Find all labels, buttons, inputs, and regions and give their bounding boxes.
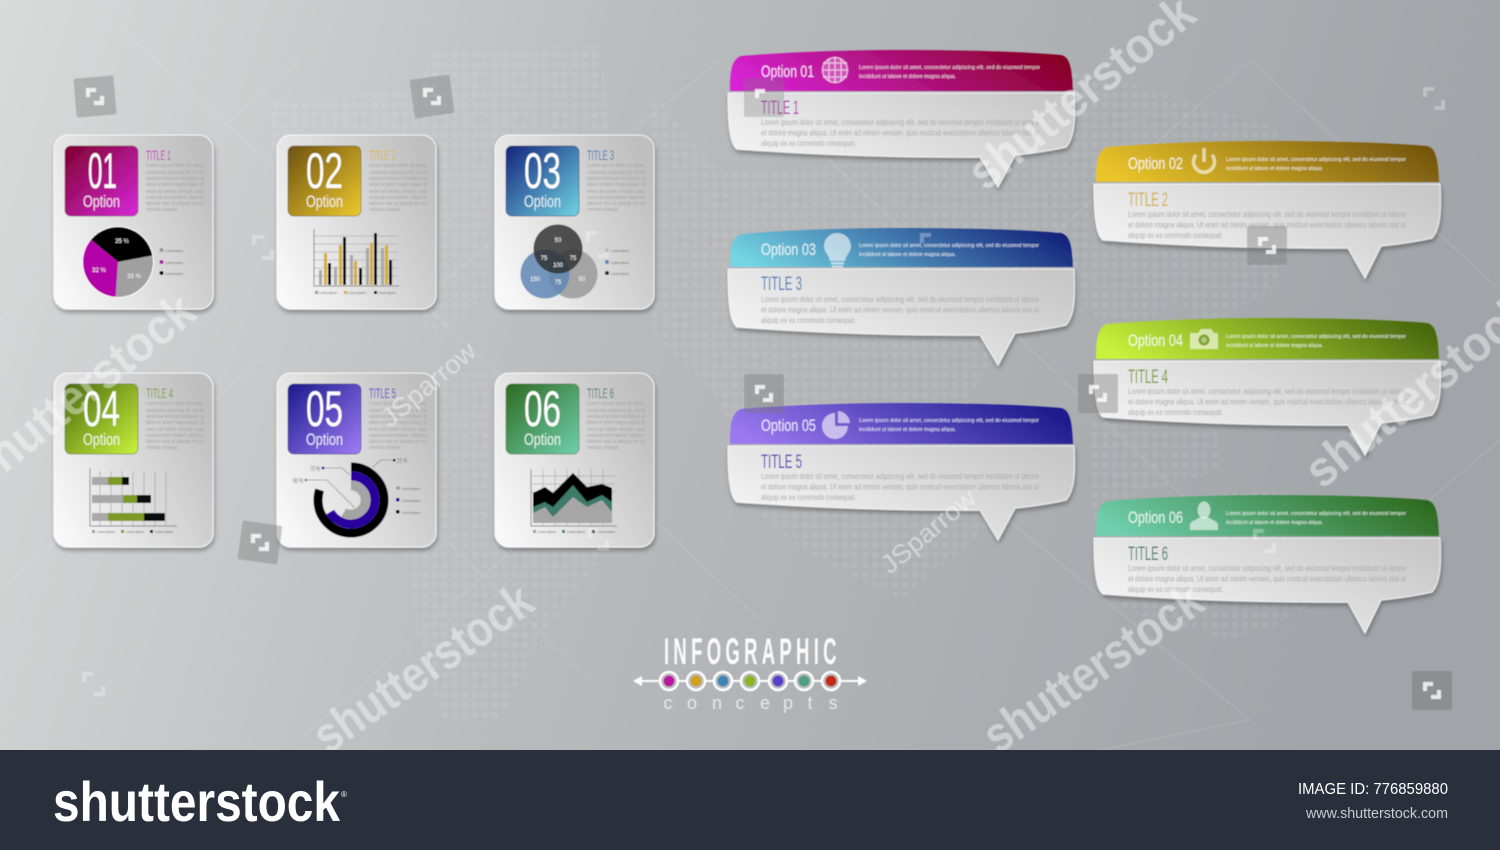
card 2 text: labore et dolore magna aliqua. Ut bbox=[369, 182, 427, 188]
card 5 text: enim ad minim veniam, quis bbox=[369, 427, 427, 433]
badge 02 bbox=[288, 143, 361, 216]
image id: IMAGE ID: 776859880 bbox=[1298, 781, 1448, 798]
card 5: radial donut chart bbox=[277, 373, 436, 547]
callout 6 bbox=[1094, 495, 1440, 633]
card 6 text: nostrud exercitation ullamco bbox=[587, 433, 645, 439]
card 1: pie chart bbox=[54, 135, 213, 309]
band text 01: incididunt ut labore et dolore magna aliqua. bbox=[859, 74, 956, 80]
band text 03 bbox=[859, 243, 1039, 258]
dotted world map bbox=[270, 45, 1310, 720]
logo subheading: concepts bbox=[664, 693, 838, 713]
bar chart: Lorem ipsum bbox=[378, 291, 396, 295]
card 6 text: eiusmod tempor incididunt ut bbox=[587, 414, 646, 420]
card 2 text: laboris nisi ut aliquip ex ea bbox=[369, 201, 427, 207]
card 5 text: consectetur adipiscing elit, sed do bbox=[369, 408, 427, 414]
title 3: TITLE 3 bbox=[761, 274, 802, 295]
card 2 text: Lorem ipsum dolor sit amet, bbox=[369, 163, 427, 169]
card 3 text: laboris nisi ut aliquip ex ea bbox=[587, 201, 645, 207]
card 1 text: laboris nisi ut aliquip ex ea bbox=[146, 201, 204, 207]
option label 01: Option 01 bbox=[761, 62, 814, 81]
card 4 text: nostrud exercitation ullamco bbox=[146, 433, 204, 439]
badge 04: Option bbox=[83, 430, 120, 449]
band text 01: Lorem ipsum dolor sit amet, consectetur adipiscing elit, sed do eiusmod tempor bbox=[859, 65, 1040, 71]
band text 02 bbox=[1226, 157, 1406, 172]
card 6: area chart bbox=[495, 373, 654, 547]
pie legend: Lorem ipsum bbox=[165, 261, 183, 265]
band text 01 bbox=[859, 65, 1040, 80]
venn diagram: Lorem ipsum bbox=[611, 261, 629, 265]
band text 06: Lorem ipsum dolor sit amet, consectetur adipiscing elit, sed do eiusmod tempor bbox=[1226, 511, 1406, 517]
card 4: stacked horizontal bars bbox=[54, 373, 213, 547]
card 3 text: consectetur adipiscing elit, sed do bbox=[587, 170, 645, 176]
horizontal bar chart: Lorem ipsum bbox=[126, 530, 144, 534]
card 2 text: commodo consequat. bbox=[369, 207, 401, 213]
horizontal bar chart: Lorem ipsum bbox=[97, 530, 115, 534]
card 1 text: TITLE 1 bbox=[146, 147, 171, 163]
band text 04: incididunt ut labore et dolore magna aliqua. bbox=[1226, 343, 1323, 349]
card 5 text: commodo consequat. bbox=[369, 445, 401, 451]
footer logo: shutterstock bbox=[53, 770, 341, 833]
venn diagram: 50 bbox=[555, 238, 562, 244]
pie legend bbox=[160, 248, 183, 276]
card 4 text bbox=[146, 385, 205, 451]
card 3: venn diagram bbox=[495, 135, 654, 309]
badge 06: Option bbox=[524, 430, 561, 449]
card 2 text: TITLE 2 bbox=[369, 147, 396, 163]
venn diagram: 75 bbox=[570, 256, 577, 262]
area chart: Lorem ipsum bbox=[567, 530, 585, 534]
band text 04: Lorem ipsum dolor sit amet, consectetur adipiscing elit, sed do eiusmod tempor bbox=[1226, 334, 1406, 340]
body text 2: Lorem ipsum dolor sit amet, consectetur adipiscing elit, sed do eiusmod tempor incididunt ut labore bbox=[1128, 209, 1406, 219]
icon: pie bbox=[822, 411, 850, 439]
radial chart: 70 % bbox=[310, 466, 320, 473]
card 6 text: consectetur adipiscing elit, sed do bbox=[587, 408, 645, 414]
body text 3: Lorem ipsum dolor sit amet, consectetur adipiscing elit, sed do eiusmod tempor incididunt ut labore bbox=[761, 294, 1039, 304]
band text 02: incididunt ut labore et dolore magna aliqua. bbox=[1226, 166, 1323, 172]
card 5 text: laboris nisi ut aliquip ex ea bbox=[369, 439, 427, 445]
venn diagram: 100 bbox=[553, 263, 564, 269]
body text 1: aliquip ex ea commodo consequat. bbox=[761, 138, 856, 148]
callout 1 bbox=[728, 50, 1074, 187]
card 4 text: consectetur adipiscing elit, sed do bbox=[146, 408, 204, 414]
card 6 text: laboris nisi ut aliquip ex ea bbox=[587, 439, 645, 445]
option label 03: Option 03 bbox=[761, 240, 816, 259]
pie legend: Lorem ipsum bbox=[165, 272, 183, 276]
option label 06: Option 06 bbox=[1128, 508, 1183, 527]
venn diagram: Lorem ipsum bbox=[611, 272, 629, 276]
body text 4: Lorem ipsum dolor sit amet, consectetur adipiscing elit, sed do eiusmod tempor incididunt ut labore bbox=[1128, 386, 1406, 396]
badge 01: Option bbox=[83, 192, 120, 211]
icon: globe bbox=[822, 57, 848, 83]
card 5 text: TITLE 5 bbox=[369, 385, 396, 401]
icon: person bbox=[1190, 502, 1218, 530]
card 2 text: enim ad minim veniam, quis bbox=[369, 189, 427, 195]
body text 5: Lorem ipsum dolor sit amet, consectetur adipiscing elit, sed do eiusmod tempor incididunt ut labore bbox=[761, 471, 1039, 481]
pie chart: 32 % bbox=[92, 268, 106, 274]
radial chart: 25 % bbox=[397, 458, 407, 465]
body text 4: aliquip ex ea commodo consequat. bbox=[1128, 407, 1223, 417]
card 4 text: Lorem ipsum dolor sit amet, bbox=[146, 401, 204, 407]
card 1 text: consectetur adipiscing elit, sed do bbox=[146, 170, 204, 176]
badge 03: 03 bbox=[524, 143, 561, 199]
band text 06 bbox=[1226, 511, 1406, 526]
title 2: TITLE 2 bbox=[1128, 190, 1168, 211]
card 5 text: eiusmod tempor incididunt ut bbox=[369, 414, 428, 420]
band text 05: Lorem ipsum dolor sit amet, consectetur adipiscing elit, sed do eiusmod tempor bbox=[859, 418, 1039, 424]
band text 06: incididunt ut labore et dolore magna aliqua. bbox=[1226, 520, 1323, 526]
callout 2 bbox=[1094, 141, 1440, 278]
badge 06: 06 bbox=[524, 381, 561, 437]
card 1 text bbox=[146, 147, 205, 213]
body text 3: et dolore magna aliqua. Ut enim ad minim veniam, quis nostrud exercitation ullamco laboris nisi ut bbox=[761, 304, 1039, 314]
horizontal bar chart: Lorem ipsum bbox=[155, 530, 173, 534]
area chart: Lorem ipsum bbox=[597, 530, 615, 534]
body text 4: et dolore magna aliqua. Ut enim ad minim veniam, quis nostrud exercitation ullamco laboris nisi ut bbox=[1128, 396, 1406, 406]
icon: power bbox=[1194, 148, 1214, 172]
card 4 text: TITLE 4 bbox=[146, 385, 173, 401]
title 4: TITLE 4 bbox=[1128, 367, 1168, 388]
radial chart: 60 % bbox=[293, 478, 303, 485]
body text 1 bbox=[761, 117, 1039, 148]
callout 4 bbox=[1094, 318, 1440, 455]
footer bar bbox=[0, 750, 1500, 850]
badge 01 bbox=[65, 143, 138, 216]
bar chart bbox=[314, 229, 399, 295]
venn diagram: 50 bbox=[579, 277, 586, 283]
icon: light bulb bbox=[824, 233, 851, 268]
badge 01: 01 bbox=[88, 143, 117, 199]
card 1 text: eiusmod tempor incididunt ut bbox=[146, 176, 205, 182]
body text 6 bbox=[1128, 563, 1406, 594]
title 6: TITLE 6 bbox=[1128, 544, 1168, 565]
card 6 text: TITLE 6 bbox=[587, 385, 614, 401]
body text 6: et dolore magna aliqua. Ut enim ad minim veniam, quis nostrud exercitation ullamco laboris nisi ut bbox=[1128, 574, 1406, 584]
body text 6: Lorem ipsum dolor sit amet, consectetur adipiscing elit, sed do eiusmod tempor incididunt ut labore bbox=[1128, 563, 1406, 573]
pie legend: Lorem ipsum bbox=[165, 249, 183, 253]
card 2 text: eiusmod tempor incididunt ut bbox=[369, 176, 428, 182]
card 3 text: enim ad minim veniam, quis bbox=[587, 189, 645, 195]
venn diagram: 75 bbox=[541, 256, 548, 262]
card 6 text: Lorem ipsum dolor sit amet, bbox=[587, 401, 645, 407]
watermark: stock icons bbox=[73, 74, 1452, 710]
card 6 text: labore et dolore magna aliqua. Ut bbox=[587, 420, 645, 426]
band text 04 bbox=[1226, 334, 1406, 349]
infographic concepts logo bbox=[633, 632, 867, 713]
card 2 text: consectetur adipiscing elit, sed do bbox=[369, 170, 427, 176]
icon: camera bbox=[1190, 329, 1218, 349]
card 5 text: Lorem ipsum dolor sit amet, bbox=[369, 401, 427, 407]
card 5 text bbox=[369, 385, 428, 451]
radial chart: Lorem ipsum bbox=[402, 511, 420, 515]
card 4 text: eiusmod tempor incididunt ut bbox=[146, 414, 205, 420]
body text 3: aliquip ex ea commodo consequat. bbox=[761, 315, 856, 325]
body text 2: et dolore magna aliqua. Ut enim ad minim veniam, quis nostrud exercitation ullamco laboris nisi ut bbox=[1128, 220, 1406, 230]
card 1 text: Lorem ipsum dolor sit amet, bbox=[146, 163, 204, 169]
body text 5: et dolore magna aliqua. Ut enim ad minim veniam, quis nostrud exercitation ullamco laboris nisi ut bbox=[761, 482, 1039, 492]
body text 5 bbox=[761, 471, 1039, 502]
badge 02: Option bbox=[306, 192, 343, 211]
watermark: JSparrow bbox=[375, 336, 982, 580]
card 3 text: Lorem ipsum dolor sit amet, bbox=[587, 163, 645, 169]
badge 02: 02 bbox=[306, 143, 343, 199]
card 3 text bbox=[587, 147, 646, 213]
area chart: Lorem ipsum bbox=[538, 530, 556, 534]
body text 6: aliquip ex ea commodo consequat. bbox=[1128, 584, 1223, 594]
card 3 text: eiusmod tempor incididunt ut bbox=[587, 176, 646, 182]
title 1: TITLE 1 bbox=[761, 98, 799, 119]
venn diagram bbox=[520, 224, 629, 298]
card 1 text: nostrud exercitation ullamco bbox=[146, 195, 204, 201]
badge 05: Option bbox=[306, 430, 343, 449]
body text 5: aliquip ex ea commodo consequat. bbox=[761, 492, 856, 502]
venn diagram: 75 bbox=[555, 280, 562, 286]
radial chart: Lorem ipsum bbox=[402, 499, 420, 503]
badge 05 bbox=[288, 381, 361, 454]
watermark: shutterstock text: shutterstock bbox=[972, 572, 1213, 764]
pie chart: 35 % bbox=[115, 239, 129, 245]
card 5 text: labore et dolore magna aliqua. Ut bbox=[369, 420, 427, 426]
card 6 text: commodo consequat. bbox=[587, 445, 619, 451]
option label 04: Option 04 bbox=[1128, 331, 1183, 350]
badge 04: 04 bbox=[83, 381, 120, 437]
card 3 text: TITLE 3 bbox=[587, 147, 614, 163]
body text 3 bbox=[761, 294, 1039, 325]
badge 06 bbox=[506, 381, 579, 454]
body text 2 bbox=[1128, 209, 1406, 240]
card 4 text: commodo consequat. bbox=[146, 445, 178, 451]
body text 1: Lorem ipsum dolor sit amet, consectetur adipiscing elit, sed do eiusmod tempor incididunt ut labore bbox=[761, 117, 1039, 127]
body text 4 bbox=[1128, 386, 1406, 417]
badge 05: 05 bbox=[306, 381, 343, 437]
band text 05 bbox=[859, 418, 1039, 433]
card 3 text: commodo consequat. bbox=[587, 207, 619, 213]
radial chart bbox=[293, 458, 420, 533]
venn diagram: 150 bbox=[530, 277, 541, 283]
card 3 text: labore et dolore magna aliqua. Ut bbox=[587, 182, 645, 188]
timeline with coloured beads bbox=[633, 672, 867, 690]
card 2 text bbox=[369, 147, 428, 213]
badge 03: Option bbox=[524, 192, 561, 211]
pie chart bbox=[82, 226, 154, 298]
option label 02: Option 02 bbox=[1128, 154, 1183, 173]
card 4 text: laboris nisi ut aliquip ex ea bbox=[146, 439, 204, 445]
logo heading: INFOGRAPHIC bbox=[664, 632, 837, 673]
card 1 text: commodo consequat. bbox=[146, 207, 178, 213]
horizontal bar chart bbox=[90, 468, 177, 534]
card 1 text: enim ad minim veniam, quis bbox=[146, 189, 204, 195]
card 2 text: nostrud exercitation ullamco bbox=[369, 195, 427, 201]
card 5 text: nostrud exercitation ullamco bbox=[369, 433, 427, 439]
callout 5 bbox=[728, 403, 1074, 540]
radial chart: Lorem ipsum bbox=[402, 487, 420, 491]
badge 03 bbox=[506, 143, 579, 216]
band text 03: Lorem ipsum dolor sit amet, consectetur adipiscing elit, sed do eiusmod tempor bbox=[859, 243, 1039, 249]
body text 2: aliquip ex ea commodo consequat. bbox=[1128, 230, 1223, 240]
card 2: bar chart bbox=[277, 135, 436, 309]
website: www.shutterstock.com bbox=[1305, 806, 1448, 822]
card 4 text: enim ad minim veniam, quis bbox=[146, 427, 204, 433]
body text 1: et dolore magna aliqua. Ut enim ad minim veniam, quis nostrud exercitation ullamco laboris nisi ut bbox=[761, 128, 1039, 138]
badge 04 bbox=[65, 381, 138, 454]
footer logo: ® bbox=[341, 790, 347, 799]
watermark: JSparrow: JSparrow bbox=[875, 483, 982, 580]
venn diagram: Lorem ipsum bbox=[611, 249, 629, 253]
option label 05: Option 05 bbox=[761, 416, 816, 435]
area chart bbox=[531, 469, 617, 534]
callout 3 bbox=[728, 228, 1074, 365]
title 5: TITLE 5 bbox=[761, 452, 802, 473]
watermark: shutterstock text: shutterstock bbox=[302, 572, 543, 764]
card 4 text: labore et dolore magna aliqua. Ut bbox=[146, 420, 204, 426]
card 6 text: enim ad minim veniam, quis bbox=[587, 427, 645, 433]
band text 03: incididunt ut labore et dolore magna aliqua. bbox=[859, 252, 956, 258]
band text 05: incididunt ut labore et dolore magna aliqua. bbox=[859, 427, 956, 433]
bar chart: Lorem ipsum bbox=[319, 291, 337, 295]
watermark: JSparrow: JSparrow bbox=[375, 336, 482, 433]
pie chart: 33 % bbox=[127, 274, 141, 280]
band text 02: Lorem ipsum dolor sit amet, consectetur adipiscing elit, sed do eiusmod tempor bbox=[1226, 157, 1406, 163]
card 3 text: nostrud exercitation ullamco bbox=[587, 195, 645, 201]
bar chart: Lorem ipsum bbox=[348, 291, 366, 295]
card 1 text: labore et dolore magna aliqua. Ut bbox=[146, 182, 204, 188]
card 6 text bbox=[587, 385, 646, 451]
